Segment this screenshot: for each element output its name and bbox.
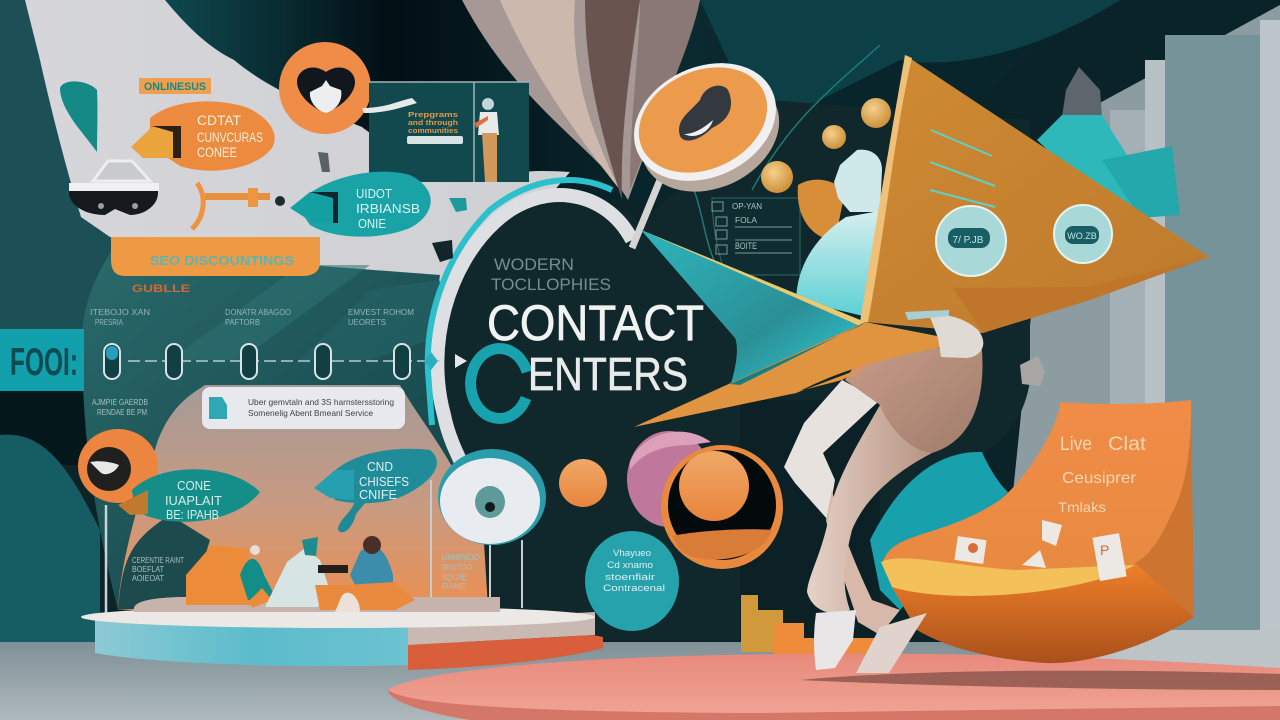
paper plane	[634, 55, 1209, 427]
heading: overline	[491, 255, 611, 294]
info bar	[202, 387, 405, 429]
callout: teal leaf bubble	[118, 469, 260, 522]
title: contact centers: ENTERS	[528, 348, 688, 400]
orange banner: GUBLLE	[132, 283, 190, 295]
callout: teal bubble	[290, 172, 431, 237]
wall screen: presenter: communities	[408, 126, 458, 135]
panel: central dark heart	[441, 100, 1030, 640]
teal sphere with text: Contracenal	[603, 583, 665, 593]
icon: white eye dial	[431, 449, 546, 608]
callout: blue bubble with drop: CNIFE	[359, 487, 397, 502]
gold orbs and data panel: OP-YAN	[732, 202, 762, 211]
left tag: FOOI: FOOI:	[10, 341, 78, 384]
callout: teal bubble: IRBIANSB	[356, 201, 420, 216]
orange chair with live chat: Live	[1060, 434, 1092, 455]
small captions on arch: RENDAE BE PM	[97, 407, 147, 417]
icon: ceiling lamp	[1037, 67, 1180, 218]
callout: blue bubble with drop: CND	[367, 459, 393, 474]
gold orbs and data panel: FOLA	[735, 216, 758, 225]
gold orbs and data panel: BOITE	[735, 241, 757, 251]
platform: left stage	[81, 597, 603, 670]
illustration: seated people	[186, 536, 415, 612]
figure: sculpted person	[796, 150, 885, 320]
teal sphere with text: Cd xnamo	[607, 560, 653, 570]
paper plane: WO.ZB	[1067, 231, 1097, 241]
paper plane: 7/ P.JB	[953, 235, 984, 246]
small captions on arch: IQUIE	[442, 572, 468, 582]
icon: orange connector	[192, 183, 285, 229]
left tag: FOOI	[0, 329, 84, 391]
small captions on arch: AJMPIE GAERDB	[92, 397, 148, 407]
small captions on arch: CERENTIE RAINT	[132, 555, 184, 565]
step blocks	[741, 595, 875, 663]
icon: tilted orange disc	[615, 41, 798, 213]
decorative curtain folds	[462, 0, 700, 200]
panel: beige arch	[118, 385, 510, 610]
wall screen: presenter: Prepgrams	[408, 110, 458, 119]
title: contact centers	[471, 295, 704, 418]
panel: teal timeline wall	[82, 250, 500, 610]
orange chair with live chat: Clat	[1108, 434, 1147, 455]
orange orb	[559, 459, 607, 507]
callout: blue bubble with drop	[314, 449, 437, 532]
porthole with orange sphere	[661, 445, 783, 569]
small wall bracket	[1020, 356, 1045, 386]
callout: orange bubble	[131, 101, 275, 171]
orange chair with live chat: P	[1100, 542, 1109, 558]
small captions on arch: AOIEOAT	[132, 573, 164, 583]
callout: teal leaf bubble: BE: IPAHB	[166, 507, 219, 522]
callout: teal leaf bubble: CONE	[177, 478, 211, 493]
timeline	[104, 344, 467, 379]
orange chair with live chat: Ceusiprer	[1062, 470, 1137, 487]
gold orbs and data panel	[694, 45, 891, 275]
orange banner: SEO DISCOUNTINGS	[150, 253, 294, 268]
timeline captions: EMVEST ROHOM	[348, 308, 414, 317]
icon: teal leaf	[60, 81, 97, 152]
teal sphere with text	[585, 531, 679, 631]
wall screen: presenter: and through	[408, 118, 458, 127]
teal sphere with text: Vhayueo	[613, 548, 651, 558]
teal sphere with text: stoenfiair	[605, 572, 655, 582]
ring: teal and white heart border	[428, 180, 660, 512]
orange banner	[111, 237, 320, 295]
label: small tag: ONLINESUS	[144, 81, 206, 93]
small captions on arch: RANE	[442, 581, 466, 591]
top centre dark backdrop	[160, 0, 1120, 200]
label: small tag	[139, 78, 211, 94]
pink sphere	[627, 431, 711, 527]
callout: teal bubble: ONIE	[358, 216, 386, 231]
timeline captions: DONATR ABAGOO	[225, 308, 291, 317]
heading: overline: WODERN	[494, 255, 574, 274]
callout: blue bubble with drop: CHISEFS	[359, 474, 409, 489]
callout: orange bubble: CUNVCURAS	[197, 130, 263, 145]
timeline captions: UEORETS	[348, 318, 386, 327]
info bar: Somenelig Abent Bmeanl Service	[248, 408, 373, 418]
heading: overline: TOCLLOPHIES	[491, 275, 611, 294]
small captions on arch: UNIRNOO	[442, 552, 480, 562]
info bar: Uber gemvtaln and 3S harnstersstoring	[248, 397, 394, 407]
title: contact centers: CONTACT	[487, 295, 704, 351]
legs of figure	[784, 345, 982, 673]
orange chair with live chat: Tmlaks	[1058, 499, 1106, 515]
pink floor disc	[388, 654, 1280, 720]
callout: teal bubble: UIDOT	[356, 186, 392, 201]
figure hand gripping plane	[905, 310, 983, 358]
callout: teal leaf bubble: IUAPLAIT	[165, 493, 222, 508]
callout: orange bubble: CDTAT	[197, 113, 241, 128]
small wall pegs	[318, 152, 467, 262]
panel: white curved board	[25, 0, 570, 290]
teal backdrop wave	[870, 452, 1008, 610]
icon: headset goggles	[69, 161, 159, 215]
small captions on arch: BEUTOO	[442, 562, 472, 572]
icon: orange circle sign	[78, 429, 158, 618]
timeline captions: PAFTORB	[225, 318, 260, 327]
timeline captions	[90, 308, 414, 327]
timeline captions: ITEBOJO XAN	[90, 308, 150, 317]
callout: orange bubble: CONEE	[197, 145, 237, 160]
wall screen: presenter	[362, 82, 529, 182]
timeline captions: PRESRIA	[95, 318, 124, 327]
icon: orange heart face circle	[279, 42, 371, 134]
small captions on arch: BOEFLAT	[132, 564, 164, 574]
orange chair with live chat	[881, 400, 1194, 663]
small captions on arch	[92, 397, 480, 591]
